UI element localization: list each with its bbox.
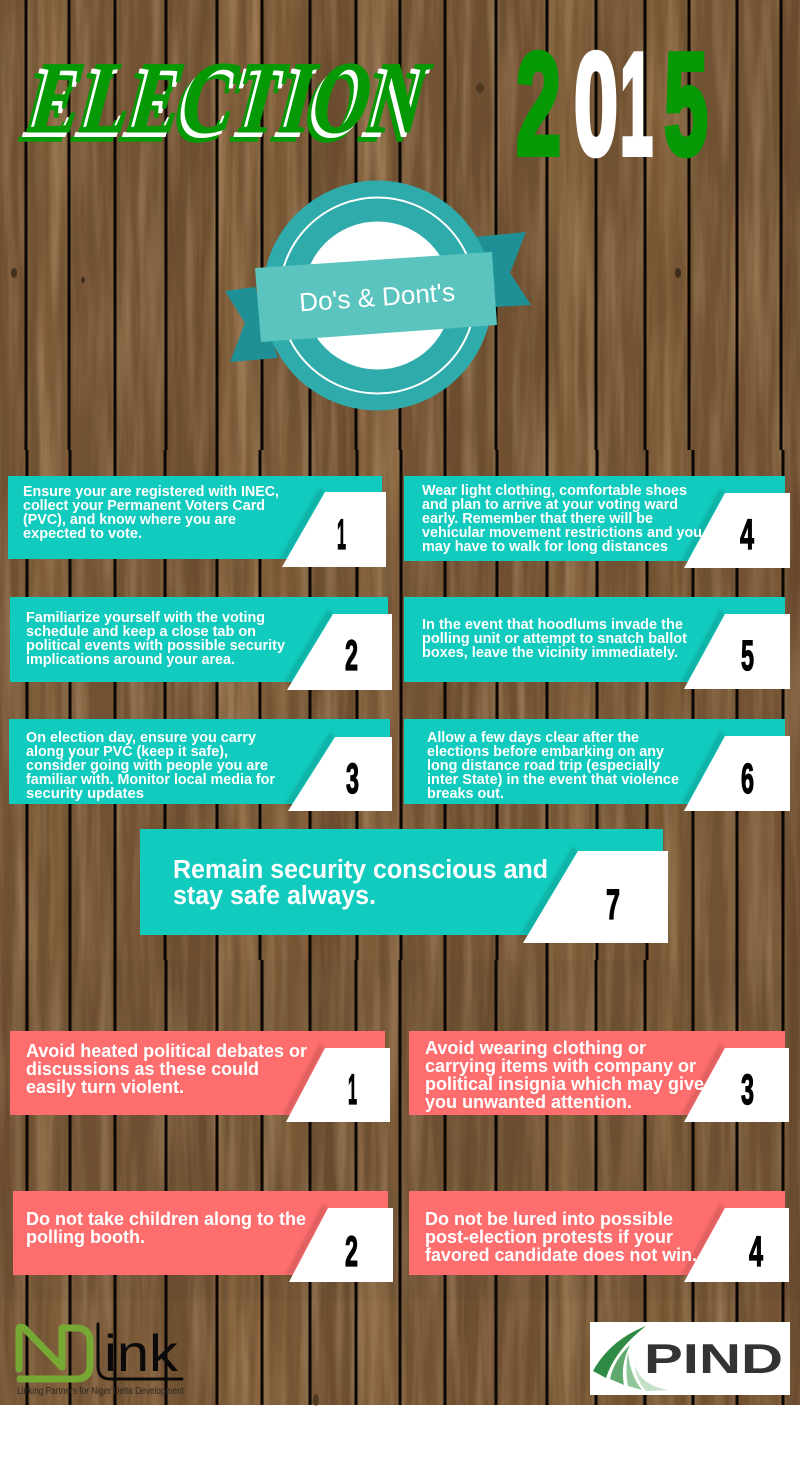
panel: do 3: security updates: [26, 786, 144, 802]
ribbon front: [255, 252, 497, 342]
panel: do 6: [404, 719, 790, 811]
panel: dont 3: Avoid wearing clothing or: [425, 1037, 646, 1058]
panel: do 1: [8, 476, 386, 567]
title: ELECTION: ELECTION: [15, 50, 429, 164]
ribbon tails: [225, 232, 531, 362]
panel: dont 4: Do not be lured into possible: [425, 1208, 673, 1229]
title: 2015: 0: [574, 23, 618, 185]
title: 2015: 1: [620, 23, 653, 185]
panel: do 2: Familiarize yourself with the voting: [26, 610, 265, 626]
panel: do 5: polling unit or attempt to snatch ballot: [422, 631, 687, 647]
panel: do 6: long distance road trip (especially: [427, 758, 660, 774]
panel: do 7: Remain security conscious and: [173, 856, 548, 884]
panel: do 5: boxes, leave the vicinity immediately.: [422, 645, 678, 661]
panel: dont 4: post-election protests if your: [425, 1226, 673, 1247]
circle emblem: [262, 180, 492, 410]
badge: Do's & Dont's: [225, 180, 531, 410]
panel: dont 4: [409, 1191, 789, 1282]
panel: do 2: 2: [345, 632, 358, 680]
panel: do 6: breaks out.: [427, 786, 504, 802]
panel: do 1: expected to vote.: [23, 526, 142, 542]
panel: do 1: collect your Permanent Voters Card: [23, 498, 265, 514]
title: 2015: 5: [664, 23, 708, 185]
logo: NDlink: [17, 1324, 184, 1397]
panel: do 4: early. Remember that there will be: [422, 511, 653, 527]
panel: dont 2: 2: [345, 1228, 358, 1276]
logo: PIND: [590, 1322, 790, 1395]
logo: NDlink: Linking Partners for Niger Delta Development: [17, 1385, 184, 1397]
panel: do 3: 3: [346, 755, 359, 803]
panel: do 3: consider going with people you are: [26, 758, 268, 774]
title: ELECTION: ELECTION: [19, 46, 433, 159]
panel: do 3: [9, 719, 392, 811]
panel: do 3: along your PVC (keep it safe),: [26, 744, 228, 760]
panel: dont 4: favored candidate does not win.: [425, 1244, 697, 1265]
panel: do 5: In the event that hoodlums invade the: [422, 617, 683, 633]
panel: dont 1: [10, 1031, 390, 1122]
panel: do 7: stay safe always.: [173, 882, 376, 910]
panel: dont 2: Do not take children along to the: [26, 1208, 306, 1229]
panel: dont 1: 1: [348, 1066, 357, 1114]
panel: do 6: 6: [741, 755, 754, 803]
title: ELECTION: ELECTION: [23, 41, 437, 155]
panel: dont 3: [409, 1031, 789, 1122]
panel: do 4: 4: [740, 511, 754, 559]
title: 2015: [516, 23, 708, 185]
panel: do 7: 7: [606, 881, 620, 929]
panel: do 5: [404, 597, 790, 689]
panel: dont 2: polling booth.: [26, 1226, 145, 1247]
title: 2015: 2: [516, 23, 561, 185]
panel: do 6: elections before embarking on any: [427, 744, 664, 760]
logo: NDlink: ink: [104, 1325, 179, 1383]
panel: dont 4: 4: [749, 1228, 763, 1276]
panel: do 4: Wear light clothing, comfortable shoes: [422, 483, 687, 499]
panel: do 5: 5: [741, 632, 754, 680]
panel: do 1: (PVC), and know where you are: [23, 512, 236, 528]
panel: do 6: inter State) in the event that violence: [427, 772, 679, 788]
panel: dont 2: [13, 1191, 393, 1282]
panel: do 6: Allow a few days clear after the: [427, 730, 639, 746]
panel: do 1: 1: [337, 511, 346, 559]
panel: do 4: and plan to arrive at your voting ward: [422, 497, 678, 513]
panel: dont 3: 3: [741, 1066, 754, 1114]
panel: do 4: vehicular movement restrictions and you: [422, 525, 702, 541]
panel: do 4: may have to walk for long distances: [422, 539, 668, 555]
logo: PIND: PIND: [644, 1335, 783, 1382]
panel: dont 1: Avoid heated political debates or: [26, 1040, 307, 1061]
panel: dont 3: carrying items with company or: [425, 1055, 696, 1076]
badge text: Do's & Dont's: [298, 277, 456, 317]
panel: do 2: implications around your area.: [26, 652, 235, 668]
panel: do 2: schedule and keep a close tab on: [26, 624, 256, 640]
panel: do 1: Ensure your are registered with INEC,: [23, 484, 279, 500]
panel: dont 1: discussions as these could: [26, 1058, 259, 1079]
panel: dont 3: political insignia which may give: [425, 1073, 704, 1094]
panel: do 3: On election day, ensure you carry: [26, 730, 256, 746]
panel: dont 1: easily turn violent.: [26, 1076, 184, 1097]
panel: do 3: familiar with. Monitor local media for: [26, 772, 275, 788]
panel: do 2: political events with possible security: [26, 638, 285, 654]
panel: do 4: [404, 476, 790, 568]
panel: do 2: [10, 597, 392, 690]
panel: do 7: [140, 829, 668, 943]
panel: dont 3: you unwanted attention.: [425, 1091, 632, 1112]
